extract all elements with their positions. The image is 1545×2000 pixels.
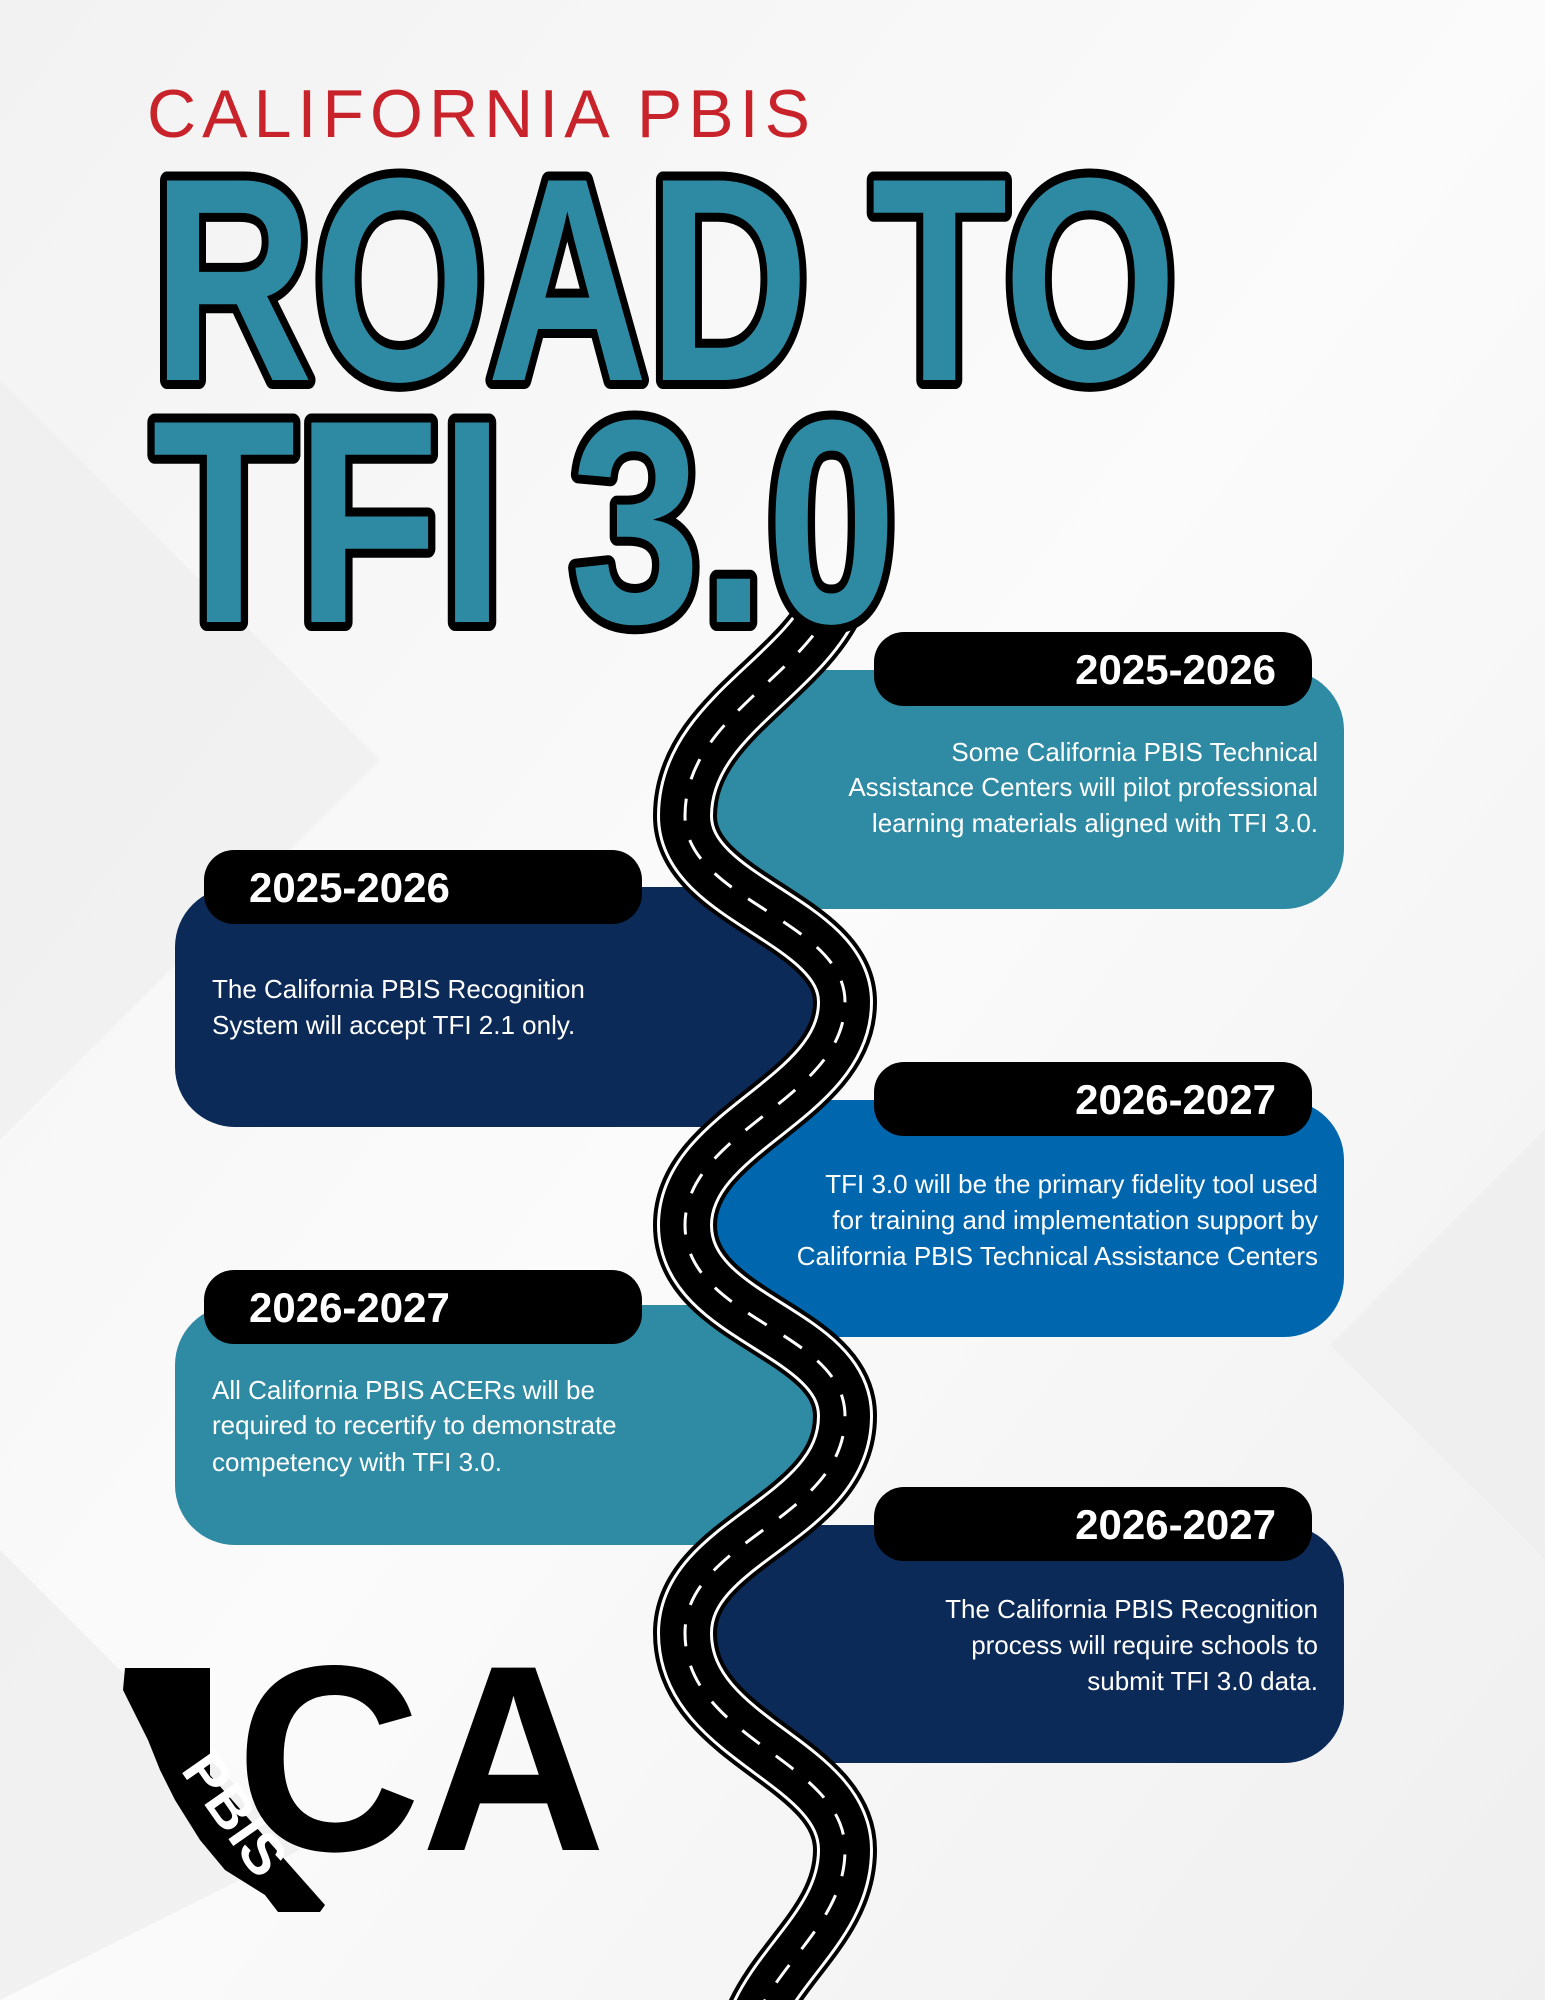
card 3: 2026-2027 primary tool bbox=[715, 1100, 1344, 1337]
pill 2: 2025-2026 bbox=[249, 864, 450, 911]
pill 4: 2026-2027 bbox=[249, 1284, 450, 1331]
text: card 2: System will accept TFI 2.1 only. bbox=[212, 1010, 575, 1040]
pill 2 bbox=[204, 850, 642, 924]
text: card 5: process will require schools to bbox=[971, 1630, 1318, 1660]
text: card 4: required to recertify to demonstrate bbox=[212, 1410, 617, 1440]
title line 1: ROAD TO bbox=[152, 118, 1177, 442]
text: card 3: California PBIS Technical Assistance Centers bbox=[797, 1241, 1318, 1271]
text: card 1: learning materials aligned with TFI 3.0. bbox=[872, 808, 1318, 838]
pill 3: 2026-2027 bbox=[1075, 1076, 1276, 1123]
text: card 1: Assistance Centers will pilot professional bbox=[848, 772, 1318, 802]
logo: CA PBIS: CA bbox=[236, 1611, 606, 1907]
pill 1: 2025-2026 bbox=[1075, 646, 1276, 693]
road bbox=[685, 600, 845, 2000]
card 4: 2026-2027 ACERs bbox=[175, 1305, 817, 1545]
text: card 5: submit TFI 3.0 data. bbox=[1087, 1666, 1318, 1696]
pill 5: 2026-2027 bbox=[1075, 1501, 1276, 1548]
pill 3 bbox=[874, 1062, 1312, 1136]
title line 2: TFI 3.0 bbox=[152, 360, 897, 684]
pill 4 bbox=[204, 1270, 642, 1344]
text: card 3: TFI 3.0 will be the primary fidelity tool used bbox=[825, 1169, 1318, 1199]
text: card 3: for training and implementation support by bbox=[832, 1205, 1318, 1235]
text: card 5: The California PBIS Recognition bbox=[945, 1594, 1318, 1624]
subtitle: CALIFORNIA PBIS bbox=[147, 76, 810, 152]
text: card 4: competency with TFI 3.0. bbox=[212, 1447, 502, 1477]
text: card 2: The California PBIS Recognition bbox=[212, 974, 585, 1004]
card 1: 2025-2026 pilot bbox=[715, 670, 1344, 909]
text: card 4: All California PBIS ACERs will be bbox=[212, 1375, 595, 1405]
pill 1 bbox=[874, 632, 1312, 706]
card 2: 2025-2026 recognition bbox=[175, 887, 817, 1127]
logo: CA PBIS: PBIS bbox=[169, 1740, 300, 1888]
pill 5 bbox=[874, 1487, 1312, 1561]
card 5: 2026-2027 recognition bbox=[715, 1525, 1344, 1763]
text: card 1: Some California PBIS Technical bbox=[951, 737, 1318, 767]
